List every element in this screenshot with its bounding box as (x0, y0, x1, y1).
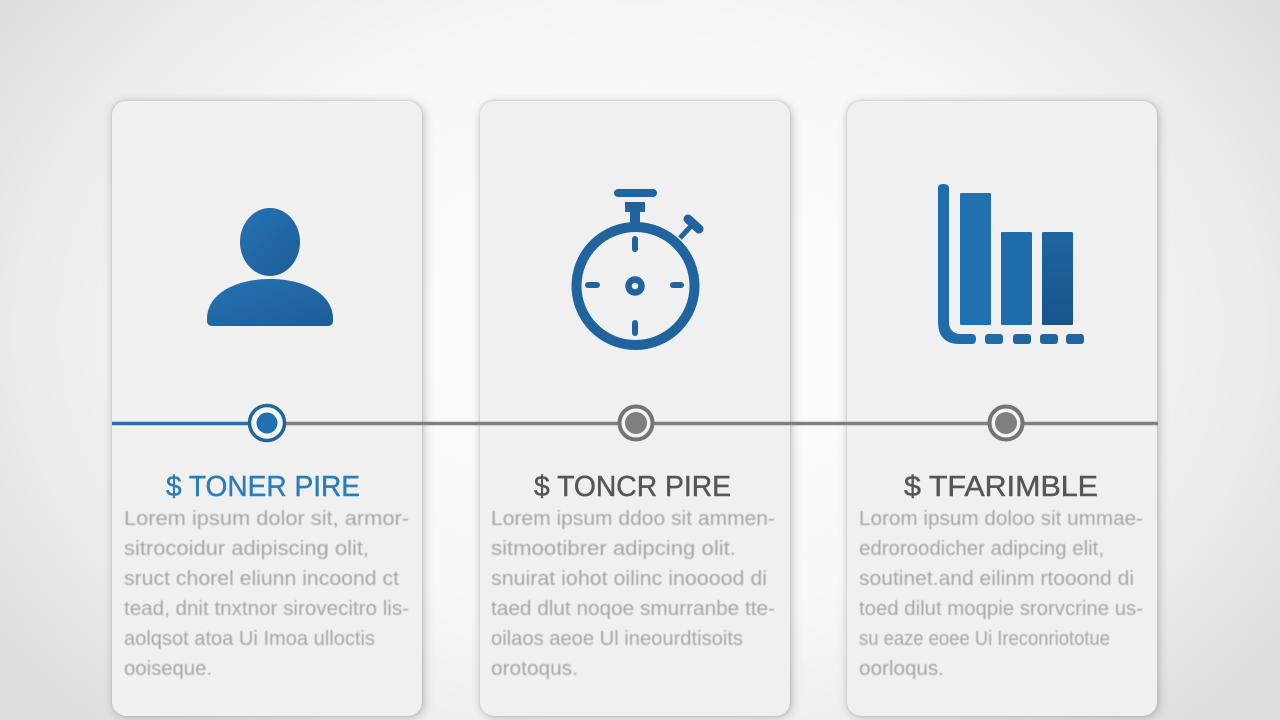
body copy: card three: toed dilut moqpie srorvcrine us- (859, 598, 1143, 620)
body copy: card three: soutinet.and eilinm rtooond di (859, 568, 1134, 590)
panel: card two (480, 101, 790, 716)
timeline (112, 406, 1158, 440)
body copy: card three (859, 508, 1143, 680)
body copy: card one: aolqsot atoa Ui Imoa ulloctis (124, 628, 375, 650)
body copy: card two: snuirat iohot oilinc inooood di (491, 568, 767, 590)
body copy: card two: Lorem ipsum ddoo sit ammen- (491, 508, 775, 530)
icon: person (207, 208, 333, 326)
body copy: card two (491, 508, 775, 680)
body copy: card one: tead, dnit tnxtnor sirovecitro lis- (124, 598, 409, 620)
icon: stopwatch (576, 193, 699, 345)
body copy: card two: taed dlut noqoe smurranbe tte- (491, 598, 775, 620)
body copy: card three: edroroodicher adipcing elit, (859, 538, 1104, 560)
body copy: card one: Lorem ipsum dolor sit, armor- (124, 508, 409, 530)
body copy: card one: sruct chorel eliunn incoond ct (124, 568, 399, 590)
panel: card one (112, 101, 422, 716)
body copy: card one (124, 508, 409, 680)
body copy: card one: ooiseque. (124, 658, 212, 680)
body copy: card two: oilaos aeoe Ul ineourdtisoits (491, 628, 743, 650)
icon: bar chart (938, 184, 1084, 344)
heading: card one: $ TONER PIRE (166, 471, 360, 503)
body copy: card one: sitrocoidur adipiscing olit, (124, 538, 369, 560)
heading: card three: $ TFARIMBLE (904, 471, 1098, 503)
marker: step three (990, 406, 1022, 440)
body copy: card two: orotoqus. (491, 658, 578, 680)
body copy: card three: su eaze eoee Ui Ireconriototue (859, 628, 1110, 650)
text block: card two (491, 471, 775, 680)
heading: card two: $ TONCR PIRE (534, 471, 731, 503)
marker: step two (620, 406, 652, 440)
body copy: card three: oorloqus. (859, 658, 944, 680)
marker: step one (250, 406, 284, 440)
body copy: card three: Lorom ipsum doloo sit ummae- (859, 508, 1143, 530)
panel: card three (847, 101, 1157, 716)
body copy: card two: sitmootibrer adipcing olit. (491, 538, 736, 560)
text block: card three (859, 471, 1143, 680)
text block: card one (124, 471, 409, 680)
